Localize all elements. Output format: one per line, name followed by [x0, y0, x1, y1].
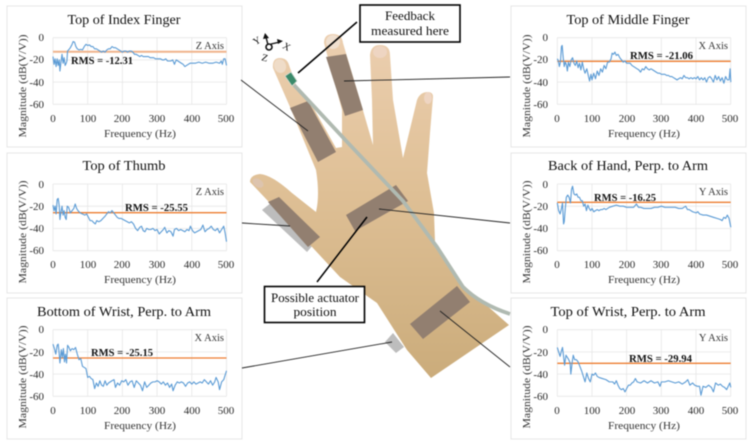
panel: top of index finger [7, 6, 242, 147]
panel: top of wrist [511, 298, 746, 439]
rms line [53, 212, 226, 214]
callout: feedback measured here: measured here [371, 24, 449, 38]
y axis tick labels: -60 [533, 391, 548, 403]
y axis tick labels: -20 [29, 201, 44, 213]
y axis tick labels: -40 [29, 369, 44, 381]
x axis tick labels [50, 405, 235, 417]
x axis tick labels: 200 [114, 113, 131, 125]
x axis tick labels: 300 [653, 113, 670, 125]
x axis tick labels: 100 [584, 405, 601, 417]
frequency response curve [557, 45, 731, 83]
y axis tick labels: 0 [542, 179, 548, 191]
x axis tick labels [554, 259, 739, 271]
x axis tick labels: 300 [149, 405, 166, 417]
x axis tick labels: 400 [688, 259, 705, 271]
rms value: RMS = -29.94 [629, 353, 693, 365]
x axis tick labels: 200 [114, 405, 131, 417]
heading: Back of Hand, Perp. to Arm [548, 159, 708, 174]
heading: Top of Thumb [82, 159, 166, 174]
x axis tick labels: 400 [184, 259, 201, 271]
rms value: RMS = -25.15 [91, 347, 153, 359]
grey wrist underside strip [385, 333, 404, 353]
panel: top of thumb [7, 153, 242, 293]
y axis title: Magnitude (dB(V/V)) [17, 34, 29, 138]
x axis tick labels [50, 113, 235, 125]
y axis tick labels [533, 32, 548, 111]
coordinate axes icon [251, 33, 293, 65]
frequency response curve [557, 347, 731, 395]
leader line: top of wrist [440, 311, 510, 367]
rms line [53, 357, 226, 359]
x axis tick labels: 100 [80, 259, 97, 271]
leader line: index finger [241, 80, 308, 131]
x axis tick labels: 200 [114, 259, 131, 271]
y axis tick labels: -20 [29, 54, 44, 66]
x axis tick labels: 500 [218, 259, 235, 271]
rms value: RMS = -16.25 [594, 192, 656, 204]
coordinate axes icon: Y [251, 35, 263, 48]
heading: Top of Middle Finger [566, 13, 690, 28]
x axis tick labels: 300 [653, 259, 670, 271]
coordinate axes icon: Z [260, 52, 269, 65]
x axis tick labels: 200 [619, 259, 636, 271]
y axis tick labels: -60 [29, 391, 44, 403]
y axis tick labels: 0 [542, 324, 548, 336]
y axis tick labels: -40 [533, 369, 548, 381]
y axis tick labels: -60 [533, 99, 548, 111]
leader line: bottom of wrist [242, 342, 392, 368]
y axis title: Magnitude (dB(V/V)) [17, 180, 29, 284]
x axis tick labels [554, 113, 739, 125]
x axis tick labels: 100 [584, 259, 601, 271]
x axis tick labels: 0 [554, 259, 560, 271]
axis label: Z Axis [196, 41, 224, 52]
tape: middle finger [326, 54, 363, 116]
x axis tick labels: 300 [149, 259, 166, 271]
rms line [557, 362, 731, 364]
x axis tick labels: 200 [619, 113, 636, 125]
rms value: RMS = -12.31 [71, 55, 133, 67]
axis label: Y Axis [699, 187, 728, 198]
y axis title: Magnitude (dB(V/V)) [521, 180, 533, 284]
x axis tick labels: 500 [218, 113, 235, 125]
x axis tick labels: 500 [722, 405, 739, 417]
axis label: Z Axis [196, 187, 224, 198]
y axis tick labels: -20 [533, 54, 548, 66]
x axis tick labels: 400 [184, 113, 201, 125]
y axis tick labels: -60 [533, 245, 548, 257]
x axis title: Frequency (Hz) [608, 128, 680, 140]
callout: feedback measured here [360, 5, 460, 42]
y axis title: Magnitude (dB(V/V)) [521, 34, 533, 138]
y axis tick labels: -20 [29, 347, 44, 359]
y axis tick labels: -40 [29, 223, 44, 235]
y axis tick labels: -20 [533, 201, 548, 213]
hand photo [250, 34, 510, 378]
x axis title: Frequency (Hz) [104, 420, 176, 432]
y axis title: Magnitude (dB(V/V)) [17, 325, 29, 429]
x axis title: Frequency (Hz) [104, 128, 176, 140]
callout: possible actuator position [264, 286, 364, 322]
axis label: X Axis [195, 333, 224, 344]
fingernails [251, 35, 432, 190]
callout: possible actuator position: Possible actuator [271, 291, 360, 305]
grey thumb accelerometer strip [262, 202, 313, 252]
leader line: middle finger [344, 77, 510, 81]
frequency response curve [53, 344, 226, 391]
x axis tick labels: 300 [149, 113, 166, 125]
sensor cable [294, 85, 510, 314]
frequency response curve [53, 198, 226, 242]
y axis tick labels [533, 179, 548, 257]
x axis tick labels [554, 405, 739, 417]
x axis tick labels: 300 [653, 405, 670, 417]
heading: Bottom of Wrist, Perp. to Arm [37, 305, 211, 320]
y axis tick labels: 0 [38, 179, 44, 191]
leader line: thumb [242, 223, 290, 226]
y axis tick labels [29, 179, 44, 257]
tape: index finger [290, 101, 336, 162]
y axis tick labels: -60 [29, 99, 44, 111]
leader line: back of hand [379, 209, 510, 223]
x axis tick labels: 500 [722, 259, 739, 271]
callout: possible actuator position: position [294, 305, 337, 319]
arrow: feedback location [298, 22, 357, 73]
y axis title: Magnitude (dB(V/V)) [521, 325, 533, 429]
x axis tick labels: 400 [184, 405, 201, 417]
rms line [557, 60, 731, 62]
rms line [557, 201, 731, 203]
x axis tick labels: 500 [722, 113, 739, 125]
y axis tick labels [29, 32, 44, 111]
tape: top of wrist [410, 286, 470, 339]
rms value: RMS = -25.55 [125, 202, 188, 214]
panel: top of middle finger [511, 6, 746, 147]
heading: Top of Wrist, Perp. to Arm [550, 305, 706, 320]
y axis tick labels: 0 [38, 32, 44, 44]
x axis tick labels: 100 [584, 113, 601, 125]
x axis tick labels: 400 [688, 113, 705, 125]
y axis tick labels: -60 [29, 245, 44, 257]
callout: feedback measured here: Feedback [385, 9, 436, 23]
x axis tick labels [50, 259, 235, 271]
x axis tick labels: 0 [554, 405, 560, 417]
y axis tick labels [533, 324, 548, 403]
frequency response curve [557, 186, 731, 227]
axis label: Y Axis [699, 333, 728, 344]
y axis tick labels: -40 [533, 77, 548, 89]
axis label: X Axis [699, 41, 728, 52]
coordinate axes icon: X [280, 41, 293, 54]
x axis tick labels: 200 [619, 405, 636, 417]
sensor on fingertip [285, 72, 297, 86]
x axis tick labels: 400 [688, 405, 705, 417]
y axis tick labels: -40 [533, 223, 548, 235]
tape: back of hand [346, 185, 408, 231]
hand silhouette [250, 34, 509, 378]
panel: bottom of wrist [7, 298, 242, 439]
x axis tick labels: 0 [50, 405, 56, 417]
panel: back of hand [511, 153, 746, 293]
y axis tick labels [29, 324, 44, 403]
x axis tick labels: 500 [218, 405, 235, 417]
rms value: RMS = -21.06 [630, 50, 694, 62]
y axis tick labels: 0 [38, 324, 44, 336]
x axis title: Frequency (Hz) [608, 274, 680, 286]
rms line [53, 51, 226, 53]
x axis title: Frequency (Hz) [104, 274, 176, 286]
x axis tick labels: 100 [80, 405, 97, 417]
x axis tick labels: 0 [50, 259, 56, 271]
heading: Top of Index Finger [68, 13, 181, 28]
x axis tick labels: 0 [50, 113, 56, 125]
y axis tick labels: 0 [542, 32, 548, 44]
x axis tick labels: 100 [80, 113, 97, 125]
x axis tick labels: 0 [554, 113, 560, 125]
y axis tick labels: -20 [533, 347, 548, 359]
tape: thumb [268, 197, 320, 247]
x axis title: Frequency (Hz) [608, 420, 680, 432]
y axis tick labels: -40 [29, 77, 44, 89]
frequency response curve [53, 42, 226, 71]
arrow: actuator position [317, 217, 367, 282]
